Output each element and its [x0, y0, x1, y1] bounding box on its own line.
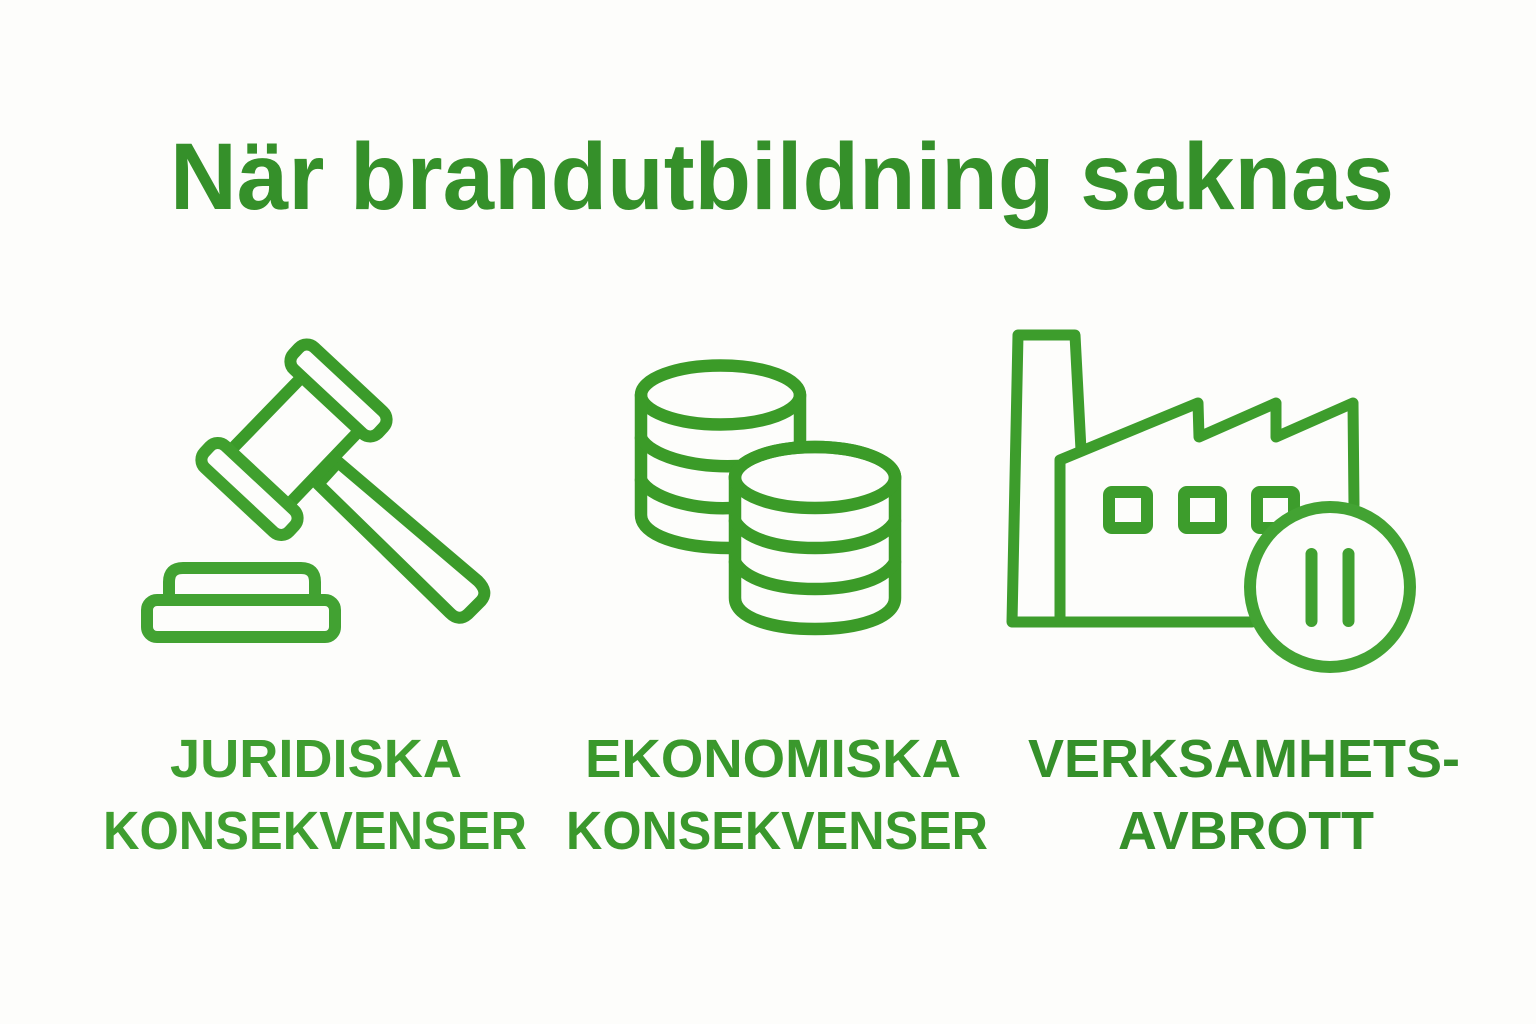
- chimney: [1012, 335, 1252, 622]
- gavel base top: [169, 568, 315, 596]
- label: juridiska konsekvenser: JURIDISKA: [170, 729, 462, 789]
- front stack: [735, 447, 895, 629]
- label: ekonomiska konsekvenser: [566, 729, 988, 861]
- title: När brandutbildning saknas: [170, 124, 1394, 230]
- windows: [1109, 492, 1294, 528]
- label: juridiska konsekvenser: [103, 729, 527, 861]
- icon: coin stacks: [641, 366, 895, 629]
- factory building: [1060, 403, 1354, 622]
- label: ekonomiska konsekvenser: EKONOMISKA: [585, 729, 961, 789]
- label: verksamhetsavbrott: AVBROTT: [1118, 801, 1374, 861]
- gavel lower head: [197, 438, 302, 540]
- label: verksamhetsavbrott: [1028, 729, 1460, 861]
- pause circle: [1250, 507, 1410, 667]
- icon: gavel: [147, 340, 484, 637]
- gavel base bottom: [147, 600, 335, 637]
- label: verksamhetsavbrott: VERKSAMHETS-: [1028, 729, 1460, 789]
- label: juridiska konsekvenser: KONSEKVENSER: [103, 801, 527, 861]
- gavel neck: [233, 380, 358, 503]
- gavel upper head: [286, 340, 391, 441]
- gavel handle: [318, 462, 484, 618]
- label: ekonomiska konsekvenser: KONSEKVENSER: [566, 801, 988, 861]
- icon: factory with pause: [1012, 335, 1410, 667]
- pause bars: [1312, 554, 1348, 621]
- back stack: [641, 366, 800, 548]
